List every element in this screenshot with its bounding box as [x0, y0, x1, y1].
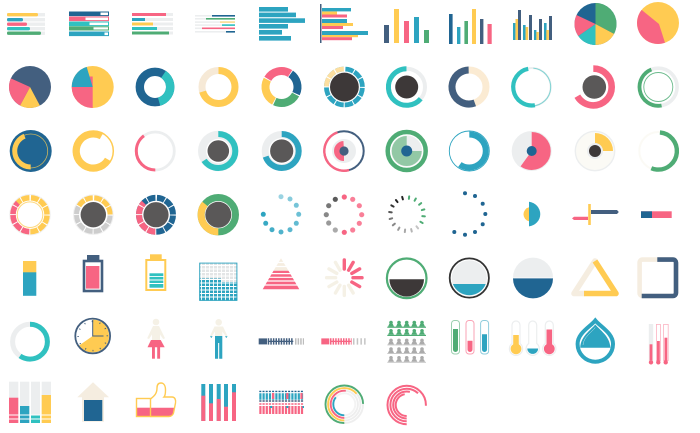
icon: donut navy cyan — [134, 66, 176, 108]
icon: man figure — [210, 319, 228, 359]
icon: progress bars yellow — [7, 13, 45, 35]
icon: grouped horizontal bar chart — [320, 4, 368, 43]
icon: horizontal bar chart teal — [259, 7, 305, 41]
icon: navy disc yellow arc — [10, 130, 52, 172]
icon: column chart five bars — [384, 9, 429, 43]
icon: pink slate target — [320, 127, 368, 175]
icon: five vertical stacked bars — [201, 384, 236, 421]
icon: cyan gauge dark core — [381, 61, 432, 113]
icon: teal ring with thin outline — [449, 131, 489, 171]
icon: green radar gauge — [388, 132, 426, 170]
icon: cyan gauge on grey disc — [198, 131, 239, 171]
icon: green half arc — [638, 131, 678, 171]
icon: dash spinner — [389, 196, 425, 232]
icon: stacked single bar — [641, 211, 672, 218]
icon: donut yellow beige — [202, 70, 235, 104]
icon: yellow ring with gap — [70, 128, 117, 174]
icon: half circles — [523, 202, 540, 226]
icon: three slice pie yellow — [72, 66, 114, 108]
icon: teal yellow bar — [23, 261, 36, 296]
icon: pink people tally — [321, 338, 367, 344]
icon: up arrow fill — [77, 382, 109, 422]
icon: polygon ring — [13, 324, 47, 359]
icon: two slice pie — [637, 2, 679, 44]
icon: clock — [75, 319, 110, 353]
icon: green yellow ring — [201, 198, 236, 232]
icon: pink concentric arcs — [388, 386, 426, 424]
icon: thumbs up — [136, 383, 176, 416]
icon: rounded square gauge — [640, 260, 676, 296]
icon: segmented grey yellow ring — [70, 192, 116, 238]
icon: rounded triangle gauge — [574, 261, 616, 294]
icon: striped pyramid — [262, 258, 301, 289]
icon: ray spinner — [327, 260, 362, 295]
icon: pink grey dot spinner — [324, 194, 364, 235]
icon: test tubes — [452, 320, 489, 354]
icon: diverging bars — [572, 204, 619, 225]
icon: column chart six bars — [449, 9, 492, 44]
icon: woman figure — [147, 319, 165, 359]
icon: green double ring — [637, 65, 680, 109]
icon: water drop gauge — [578, 320, 613, 362]
icon: slate battery — [84, 255, 102, 291]
icon: pink arc on grey ring — [136, 132, 174, 170]
icon: half filled navy disc — [513, 258, 553, 298]
icon: green ring half dark — [387, 258, 427, 298]
icon: slate beige donut — [447, 65, 491, 109]
icon: cyan thin ring — [510, 66, 553, 108]
icon: people pictogram grid — [387, 321, 426, 363]
icon: flat progress bars — [132, 13, 173, 34]
icon: navy dot spinner — [452, 191, 487, 237]
icon: segmented pink yellow ring — [10, 194, 50, 235]
icon: four column level chart — [9, 382, 51, 423]
icon: grouped column chart — [513, 10, 552, 40]
icon: yellow battery — [146, 254, 165, 290]
icon: pink gauge dark core — [575, 69, 612, 105]
icon: segmented navy pink ring — [139, 198, 173, 232]
icon: thin thermometer tubes — [649, 324, 668, 364]
icon: four colour donut — [259, 65, 304, 109]
icon: tally grid chart — [259, 391, 304, 410]
icon: three slice pie slate — [9, 66, 51, 108]
icon: yellow quarter sector — [575, 131, 615, 171]
icon: teal gauge on grey disc — [262, 131, 302, 171]
icon: multicolour concentric arcs — [325, 386, 363, 423]
icon: teal dot spinner — [261, 194, 301, 234]
icon: outlined progress bars — [70, 12, 108, 36]
icon: thin right-aligned bars — [195, 15, 235, 33]
icon: segmented teal ring — [326, 69, 362, 105]
icon: waffle grid chart — [199, 263, 237, 301]
icon: pink sector on grey disc — [512, 131, 552, 171]
icon: five slice pie — [574, 3, 616, 45]
icon: slate people tally — [259, 338, 304, 344]
icon: thermometers — [509, 321, 556, 355]
icon: dark ring teal level — [450, 258, 489, 298]
